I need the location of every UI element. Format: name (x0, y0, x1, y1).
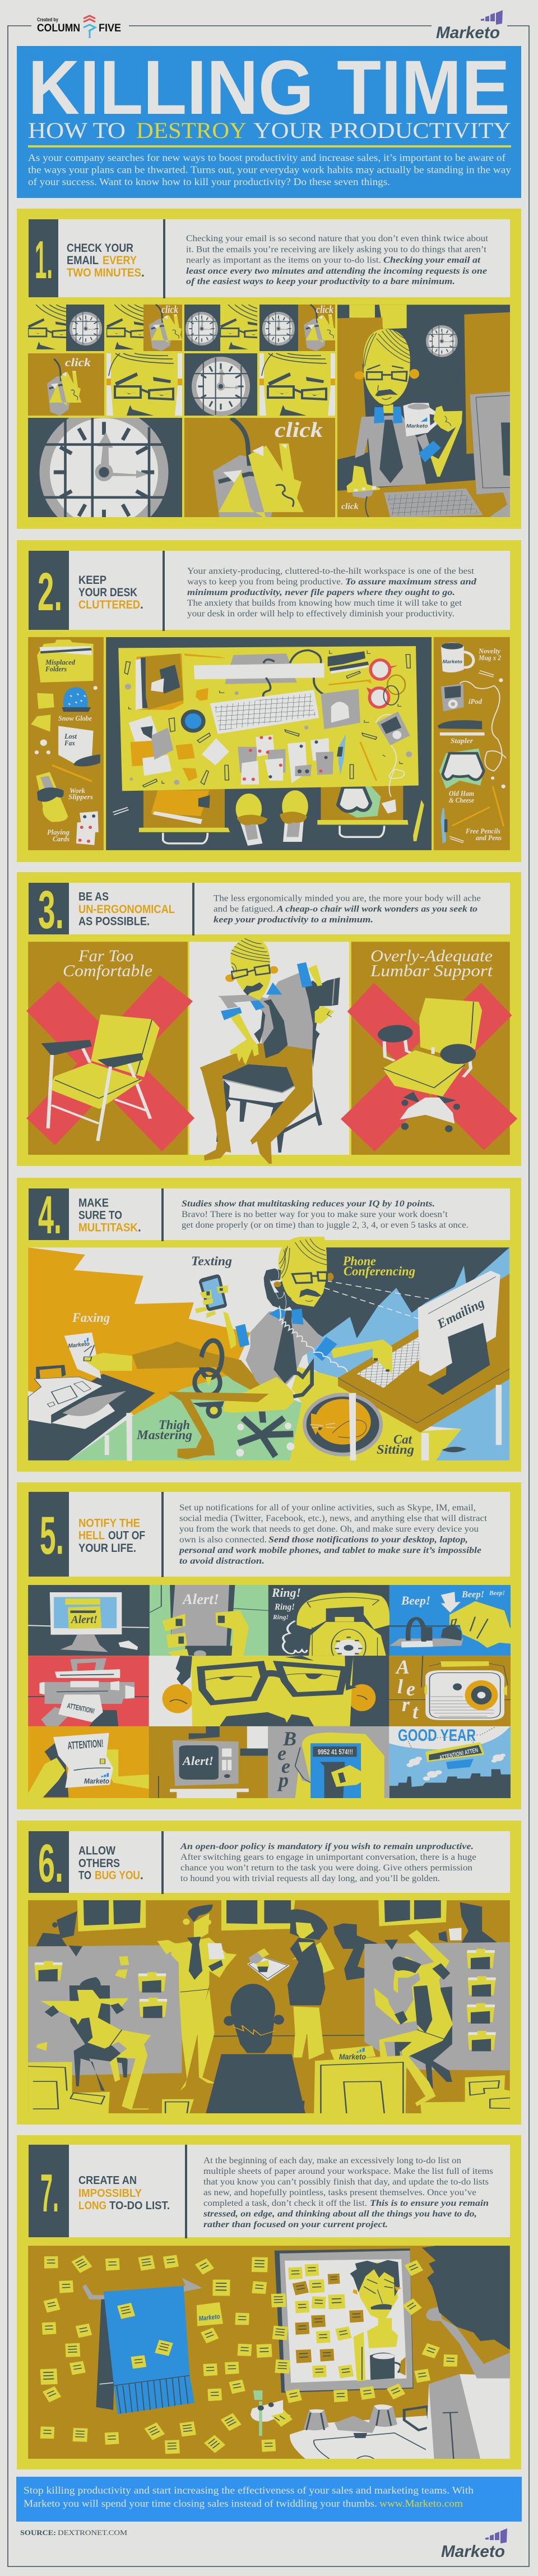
scene captions: Faxing (72, 1311, 110, 1325)
right column: items (434, 637, 510, 850)
labels on the alert tiles: Alert! (182, 1591, 219, 1607)
section 3 header: A cheap-o chair will work wonders as you seek to (276, 904, 477, 914)
section 4 header: SURE TO (78, 1209, 122, 1222)
illustration: multitasking man and cat (168, 1237, 392, 1460)
subtitle (28, 118, 511, 143)
text labels on the item columns: iPod (469, 698, 483, 706)
icon: slippers (236, 790, 308, 846)
section 7 header: that you know you can’t possibly finish that day, and update the to-do lists (203, 2177, 489, 2187)
labels on the alert tiles: l (397, 1675, 403, 1698)
labels on the alert tiles: p (277, 1769, 289, 1791)
section 1 header: 1. (35, 230, 53, 290)
tile: blimp over city (389, 1726, 511, 1799)
glasses on counter (404, 2407, 430, 2430)
tile strip: faces, clocks and clicks (28, 304, 337, 416)
section 3 header: BE AS (78, 891, 109, 903)
section 4 header (29, 1185, 510, 1245)
towel rack and towel (82, 2278, 202, 2414)
section 5 header: personal and work mobile phones, and tablet to make sure it’s impossible (178, 1546, 481, 1555)
red X right (341, 983, 517, 1151)
section 5 header: Set up notifications for all of your online activities, such as Skype, IM, email, (179, 1503, 476, 1513)
labels on the alert tiles: Beep! (401, 1593, 430, 1607)
section 2 header: YOUR DESK (78, 586, 137, 599)
section 4 header: MULTITASK (78, 1222, 138, 1234)
scene captions: Mastering (136, 1428, 192, 1442)
panel: section 2 (17, 540, 521, 862)
text labels on the item columns: Cards (53, 835, 69, 843)
section 1 header: TWO MINUTES (67, 266, 141, 279)
swivel base (236, 1412, 294, 1457)
section 3 header: 3. (38, 880, 64, 940)
tile row 1: alerts (28, 1585, 511, 1656)
labels on the alert tiles: e (406, 1678, 415, 1700)
section 7 header: 7. (40, 2163, 59, 2223)
labels on the alert tiles: B (282, 1727, 296, 1750)
header panel (17, 45, 521, 198)
scene captions: Emailing (434, 1296, 486, 1331)
scene captions: Texting (191, 1254, 232, 1268)
tile strip: faces, clocks and clicks: click (316, 304, 333, 316)
labels on the alert tiles: Ring! (271, 1586, 301, 1600)
cupcake tray (247, 1948, 290, 1981)
section 6 header: TO (78, 1869, 91, 1882)
foreground file boxes (28, 2045, 510, 2113)
section 2 header: your desk in order will help to effectively diminish your productivity. (187, 609, 454, 619)
tile: beeping phone (268, 1726, 389, 1799)
title (28, 45, 510, 131)
section 1 header (29, 219, 510, 298)
left column: items (28, 637, 104, 850)
section 7 header: completed a task, don’t check it off the list. (203, 2199, 367, 2208)
closing call to action (16, 2477, 522, 2522)
sans labels on the alert tiles: GOOD YEAR (398, 1726, 476, 1745)
icon: stapler (438, 720, 484, 736)
tile: television (149, 1726, 268, 1799)
closing call to action: Stop killing productivity and start increasing the effectiveness of your sales and marketing teams. With (24, 2485, 474, 2496)
panel: section 6 (17, 1821, 521, 2125)
tile strip: faces, clocks and clicks: click (65, 356, 91, 369)
chair captions: Lumbar Support (370, 961, 493, 980)
text labels on the item columns: Slippers (68, 793, 93, 801)
section 2 header: 2. (38, 562, 62, 622)
section 1 header: Checking your email is so second nature that you don’t even think twice about (186, 234, 489, 243)
section 7 header: IMPOSSIBLY (78, 2187, 142, 2200)
icon: pen (441, 808, 446, 844)
labels on the alert tiles: Ring! (274, 1602, 295, 1612)
phone handset (264, 1269, 291, 1310)
cat in bed (303, 1393, 383, 1460)
chair: lumbar support (373, 998, 482, 1132)
chair captions: Far Too (78, 947, 133, 965)
section 6 header (29, 1831, 510, 1894)
subtitle: DESTROY (136, 118, 247, 143)
torso (245, 1311, 323, 1394)
logo: Column Five (37, 16, 121, 38)
logo: Marketo bottom (441, 2528, 507, 2561)
section 3 header: and be fatigued. (214, 904, 275, 914)
labels on the alert tiles: Alert! (70, 1614, 98, 1626)
section 4 header: Studies show that multitasking reduces your IQ by 10 points. (182, 1199, 435, 1209)
section 6 header: ALLOW (78, 1844, 115, 1858)
scene captions: Thigh (159, 1418, 190, 1432)
closing call to action: Marketo you will spend your time closing sales instead of twiddling your thumbs. (24, 2498, 377, 2509)
section 5 header (29, 1492, 510, 1577)
desk (338, 1274, 509, 1432)
icon: novelty mug: Marketo (443, 659, 463, 664)
sink and toothbrush (251, 2390, 460, 2459)
icon: work slipper (36, 772, 68, 822)
section 7 header: multiple sheets of paper around your workspace. Make the list full of items (203, 2167, 493, 2176)
section 1 header: it. But the emails you’re receiving are likely asking you to do things that aren’t (186, 245, 487, 255)
section 3 header (29, 880, 510, 940)
desk: iPod (377, 712, 410, 745)
section 7 header: rather than focused on your current project. (203, 2220, 388, 2229)
section 2 header: . (140, 598, 143, 611)
text labels on the item columns: Old Ham (449, 790, 474, 798)
chair captions (63, 947, 493, 980)
labels on the alert tiles: r (402, 1693, 410, 1716)
windows (77, 1900, 447, 1932)
panel: section 4 (17, 1178, 521, 1472)
labels on the alert tiles: Beep! (489, 1589, 505, 1597)
panel: section 3 (17, 872, 521, 1166)
chair captions: Comfortable (63, 961, 152, 980)
intro text: As your company searches for new ways to boost productivity and increase sales, it’s important to be aware of (28, 152, 505, 163)
illustration: office interruptions (28, 1900, 510, 2113)
labels on the alert tiles: e (277, 1742, 286, 1764)
section 7 header: TO-DO LIST. (109, 2200, 170, 2212)
text labels on the item columns: Mug x 2 (478, 654, 501, 662)
illustration background: fax, desk, monitor (28, 1247, 509, 1461)
tile: big stressed face (149, 1655, 389, 1726)
subtitle: HOW TO (28, 118, 126, 143)
right seated man (374, 1930, 453, 2106)
labels on the alert tiles: Alert! (182, 1754, 214, 1768)
tile: radio (389, 1656, 511, 1726)
scene captions: Marketo (68, 1341, 90, 1349)
panel: section 7 (17, 2135, 521, 2469)
chair captions: Overly-Adequate (370, 947, 493, 965)
logo: Marketo top: Marketo (436, 24, 500, 42)
text labels on the item columns: Fax (64, 739, 75, 747)
section 5 header: Send those notifications to your desktop, laptop, (268, 1535, 468, 1545)
section 6 header: An open-door policy is mandatory if you wish to remain unproductive. (180, 1842, 474, 1851)
tile: desktop alert (28, 1585, 150, 1656)
section 3 header: The less ergonomically minded you are, the more your body will ache (214, 894, 481, 903)
sans labels on the alert tiles (66, 1701, 479, 1785)
illustration: slouching man on chair (200, 938, 340, 1164)
section 1 header: EVERY (103, 254, 137, 267)
section 7 header: At the beginning of each day, make an excessively long to-do list on (203, 2156, 461, 2165)
desk: snow globe (181, 709, 206, 732)
section 1 header: nearly as important as the items on your to-do list. (186, 256, 381, 265)
section 2 header: minimum productivity, never file papers where they ought to go. (187, 588, 455, 597)
desk: red glasses (367, 660, 405, 707)
source note (20, 2528, 127, 2537)
sans labels on the alert tiles: ATTENTION! (67, 1738, 104, 1752)
icon: iPod (441, 684, 464, 712)
left seated man (40, 1977, 151, 2109)
source note: DEXTRONET.COM (58, 2528, 127, 2537)
labels on the alert tiles: Beep! (461, 1589, 484, 1600)
tile strip: faces, clocks and clicks: click (161, 304, 178, 316)
subtitle: YOUR PRODUCTIVITY (253, 118, 511, 143)
section 1 header: of the easiest ways to keep your productivity to a bare minimum. (186, 277, 455, 286)
icon: misplaced folders (37, 640, 94, 683)
text labels on the item columns: Playing (47, 828, 69, 836)
tile: rotary phone (268, 1585, 389, 1656)
background colleagues (36, 1902, 498, 1980)
text labels on the item columns: Work (69, 787, 86, 795)
section 6 header: BUG YOU (95, 1869, 140, 1882)
pet bowl (437, 1447, 471, 1460)
person from behind (422, 2246, 510, 2459)
text labels on the item columns: Snow Globe (58, 715, 92, 722)
closing call to action: www.Marketo.com (379, 2498, 463, 2509)
section 4 header: get done properly (or on time) than to juggle 2, 3, 4, or even 5 tasks at once. (182, 1220, 469, 1230)
section 7 header: stressed, on edge, and thinking about all the things you have to do, (203, 2209, 477, 2219)
desk: mouse pad (321, 689, 360, 729)
chair: far too comfortable (41, 1015, 160, 1141)
section 4 header: Bravo! There is no better way for you to make sure your work doesn’t (182, 1210, 448, 1219)
section 6 header: chance you won’t return to the task you were doing. Give others permission (180, 1863, 472, 1873)
desk: pen (338, 734, 346, 775)
logo: Column Five: COLUMN (37, 22, 80, 34)
section 2 header: To assure maximum stress and (345, 577, 476, 587)
illustration: man drinking coffee at desk: click (341, 503, 359, 511)
section 5 header: OUT OF (108, 1529, 145, 1542)
illustration: man drinking coffee at desk (337, 305, 510, 518)
illustration: bathroom covered in sticky notes: Marketo (198, 2312, 220, 2322)
section 5 header: HELL (78, 1529, 105, 1542)
labels on the alert tiles: e (281, 1755, 290, 1777)
illustration panels and chairs (26, 942, 517, 1155)
icon: snow globe (62, 687, 91, 712)
section 1 header: CHECK YOUR (67, 242, 133, 255)
faxing foot and paper (64, 1333, 220, 1379)
illustration: bathroom covered in sticky notes (28, 2246, 510, 2459)
tile row 2: printer, face, radio (27, 1655, 511, 1726)
section 4 header: MAKE (78, 1197, 109, 1209)
logo: Marketo bottom: Marketo (441, 2542, 505, 2561)
scene captions: Phone (342, 1254, 376, 1268)
tile: printer (27, 1656, 149, 1726)
tile: beeping pager (389, 1585, 511, 1656)
section 5 header: NOTIFY THE (78, 1517, 140, 1530)
section 7 header: as new, and hopefully pointless, tasks present themselves. Once you’ve (203, 2188, 476, 2197)
scene captions: Cat (393, 1432, 412, 1446)
section 7 header: This is to ensure you remain (370, 2199, 489, 2208)
sans labels on the alert tiles: 9952 41 574!!! (318, 1748, 353, 1756)
section 2 header: CLUTTERED (78, 598, 140, 611)
labels on the alert tiles (70, 1586, 505, 1791)
labels on the alert tiles: t (412, 1701, 419, 1723)
red X left (26, 975, 194, 1151)
desk: playing cards (238, 735, 333, 785)
mirror (275, 2248, 414, 2393)
paper clips (124, 655, 410, 787)
section 6 header: OTHERS (78, 1857, 120, 1870)
intro text: the ways your plans can be thwarted. Turns out, your everyday work habits may actually be standing in the way (28, 164, 511, 175)
desk: papers stack (136, 653, 184, 710)
source note: SOURCE: (20, 2528, 56, 2537)
scene captions: Conferencing (344, 1264, 415, 1278)
big mouse click tile (184, 418, 335, 517)
section 3 header: keep your productivity to a minimum. (214, 915, 373, 924)
logo: Column Five: FIVE (99, 22, 121, 34)
section 6 header: 6. (38, 1833, 63, 1893)
big mouse click tile: click (275, 418, 323, 442)
panel: section 1 (17, 209, 521, 541)
icon: ham and cheese (439, 749, 484, 789)
cubicle walls (28, 1942, 510, 2075)
section 3 header: AS POSSIBLE. (78, 915, 150, 928)
section 5 header: you from the work that needs to get done. Oh, and make sure every device you (179, 1524, 479, 1534)
section 2 header: The anxiety that builds from knowing how much time it will take to get (187, 598, 462, 608)
section 6 header: After switching gears to engage in unimportant conversation, there is a huge (180, 1852, 476, 1862)
tile: alert hand on tablet (150, 1585, 268, 1658)
icon: playing cards (76, 811, 99, 845)
section 7 header: CREATE AN (78, 2174, 137, 2187)
intro text (28, 152, 511, 187)
text labels on the item columns: Folders (45, 665, 67, 673)
labels on the alert tiles: Ring! (272, 1613, 289, 1621)
text labels on the item columns: Novelty (478, 647, 500, 655)
woman (287, 1909, 335, 2059)
section 5 header: social media (Twitter, Facebook, etc.), news, and anything else that will distract (179, 1514, 488, 1523)
head (279, 1237, 327, 1307)
logo: Column Five: Created by (37, 17, 58, 22)
section 2 header (29, 551, 510, 631)
text labels on the item columns: Lost (64, 732, 77, 740)
section 5 header: to avoid distraction. (179, 1556, 265, 1566)
labels on the alert tiles: A (395, 1656, 410, 1678)
section 5 header: YOUR LIFE. (78, 1542, 136, 1555)
logo: Marketo top (436, 10, 503, 42)
section 1 header: EMAIL (67, 254, 99, 267)
section 4 header: 4. (38, 1185, 62, 1245)
scene captions: Sitting (377, 1443, 414, 1457)
fax machine on table (28, 1365, 155, 1461)
section 5 header: own is also connected. (179, 1535, 267, 1545)
section 4 header: . (138, 1222, 141, 1234)
section 3 header: UN-ERGONOMICAL (78, 903, 175, 916)
foreground boss silhouette (206, 1984, 305, 2113)
section 1 header: . (141, 266, 145, 279)
title: KILLING (28, 45, 314, 131)
section 5 header: 5. (40, 1505, 64, 1566)
text labels on the item columns (45, 647, 502, 843)
text labels on the item columns: and Pens (476, 834, 502, 842)
section 2 header: KEEP (78, 574, 106, 587)
section 1 header: Checking your email at (383, 256, 481, 265)
tile row 3: notices (28, 1726, 511, 1799)
section 6 header: . (140, 1869, 143, 1882)
sans labels on the alert tiles: Marketo (84, 1777, 109, 1785)
section 2 header: Your anxiety-producing, cluttered-to-the-hilt workspace is one of the best (187, 566, 475, 576)
faucet (304, 2404, 397, 2438)
notes (39, 2255, 458, 2454)
sans labels on the alert tiles: ATTENTION! (66, 1701, 95, 1715)
section 7 header: LONG (78, 2200, 106, 2212)
desk: papers (129, 716, 157, 741)
mobile phone (195, 1274, 228, 1318)
tile: attention paper (28, 1726, 149, 1799)
text labels on the item columns: & Cheese (449, 796, 474, 804)
illustration: man drinking coffee at desk: Marketo (406, 423, 428, 429)
section 6 header: to hound you with trivial requests all day long, and you’ll be golden. (180, 1874, 440, 1883)
title: TIME (337, 45, 510, 131)
intro text: of your success. Want to know how to kill your productivity? Do these seven things. (28, 176, 390, 187)
text labels on the item columns: Misplaced (45, 658, 76, 666)
section 2 header: ways to keep you from being productive. (187, 577, 343, 587)
illustration: office interruptions: Marketo (339, 2052, 366, 2061)
text labels on the item columns: Stapler (451, 737, 473, 745)
text labels on the item columns: Free Pencils (465, 827, 500, 835)
right arm (331, 1339, 392, 1373)
big clock tile (28, 418, 182, 517)
icon: lost fax (58, 726, 100, 766)
panel: section 5 (17, 1482, 521, 1809)
scene captions (68, 1254, 486, 1457)
section 7 header (29, 2145, 510, 2238)
curly phone cord (279, 1306, 347, 1372)
center: overhead desk (106, 637, 432, 850)
section 1 header: least once every two minutes and attending the incoming requests is one (186, 266, 487, 276)
sans labels on the alert tiles: ATTENTION! ATTEN (439, 1747, 479, 1762)
icon: novelty mug (441, 642, 474, 672)
man with mug (157, 1905, 236, 2091)
